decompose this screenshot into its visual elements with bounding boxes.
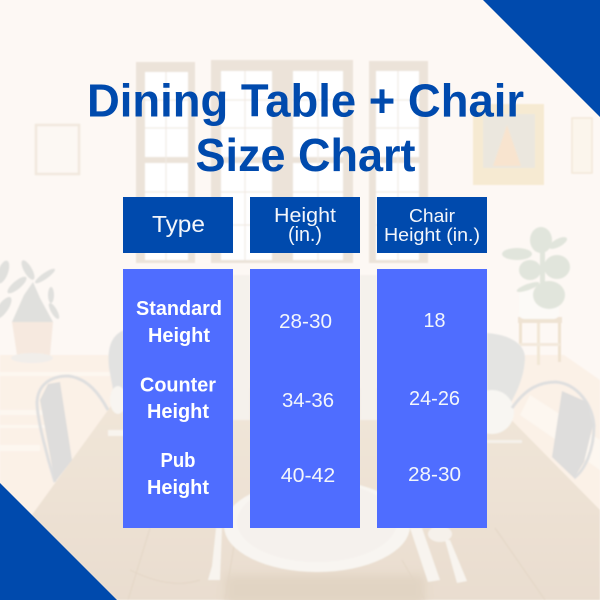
window frames bbox=[136, 60, 428, 263]
column: table heights bbox=[250, 269, 360, 528]
wall pictures bbox=[36, 125, 79, 174]
left plant bbox=[12, 322, 53, 355]
column: chair heights bbox=[377, 269, 487, 528]
glassware between the columns bbox=[233, 275, 250, 420]
value: pub table height: 40-42 bbox=[281, 465, 335, 487]
header: Height (in.): (in.) bbox=[288, 224, 322, 246]
front left chair bbox=[37, 376, 108, 482]
front right chair bbox=[512, 382, 594, 478]
row label: Counter Height: Counter bbox=[140, 374, 216, 396]
header: Height (in.): Height bbox=[274, 205, 336, 227]
back chairs bbox=[108, 330, 124, 402]
right plant bbox=[519, 322, 522, 344]
corner triangle: bottom left bbox=[0, 483, 117, 600]
floor bbox=[0, 355, 600, 600]
row label: Pub Height: Height bbox=[147, 477, 209, 499]
header: Chair Height (in.) bbox=[377, 197, 487, 253]
row label: Standard Height: Standard bbox=[136, 298, 222, 320]
value: counter table height: 34-36 bbox=[282, 390, 334, 412]
header: Chair Height (in.): Height (in.) bbox=[384, 224, 480, 245]
plate bbox=[224, 480, 410, 572]
header: Chair Height (in.): Chair bbox=[409, 205, 455, 226]
row label: Standard Height: Height bbox=[148, 325, 210, 347]
value: pub chair height: 28-30 bbox=[408, 464, 461, 486]
row label: Pub Height: Pub bbox=[160, 450, 196, 472]
value: counter chair height: 24-26 bbox=[409, 388, 460, 410]
value: standard table height: 28-30 bbox=[279, 311, 332, 333]
header: Height (in.) bbox=[250, 197, 360, 253]
table bbox=[0, 388, 600, 600]
column: table types bbox=[123, 269, 233, 528]
title: Size Chart bbox=[196, 129, 416, 181]
flatware bbox=[208, 528, 222, 580]
header: Type: Type bbox=[152, 211, 205, 237]
title bbox=[87, 74, 524, 181]
row label: Counter Height: Height bbox=[147, 401, 209, 423]
header: Type bbox=[123, 197, 233, 253]
corner triangle: top right bbox=[483, 0, 600, 117]
title: Dining Table + Chair bbox=[87, 74, 524, 126]
value: standard chair height: 18 bbox=[424, 310, 446, 332]
